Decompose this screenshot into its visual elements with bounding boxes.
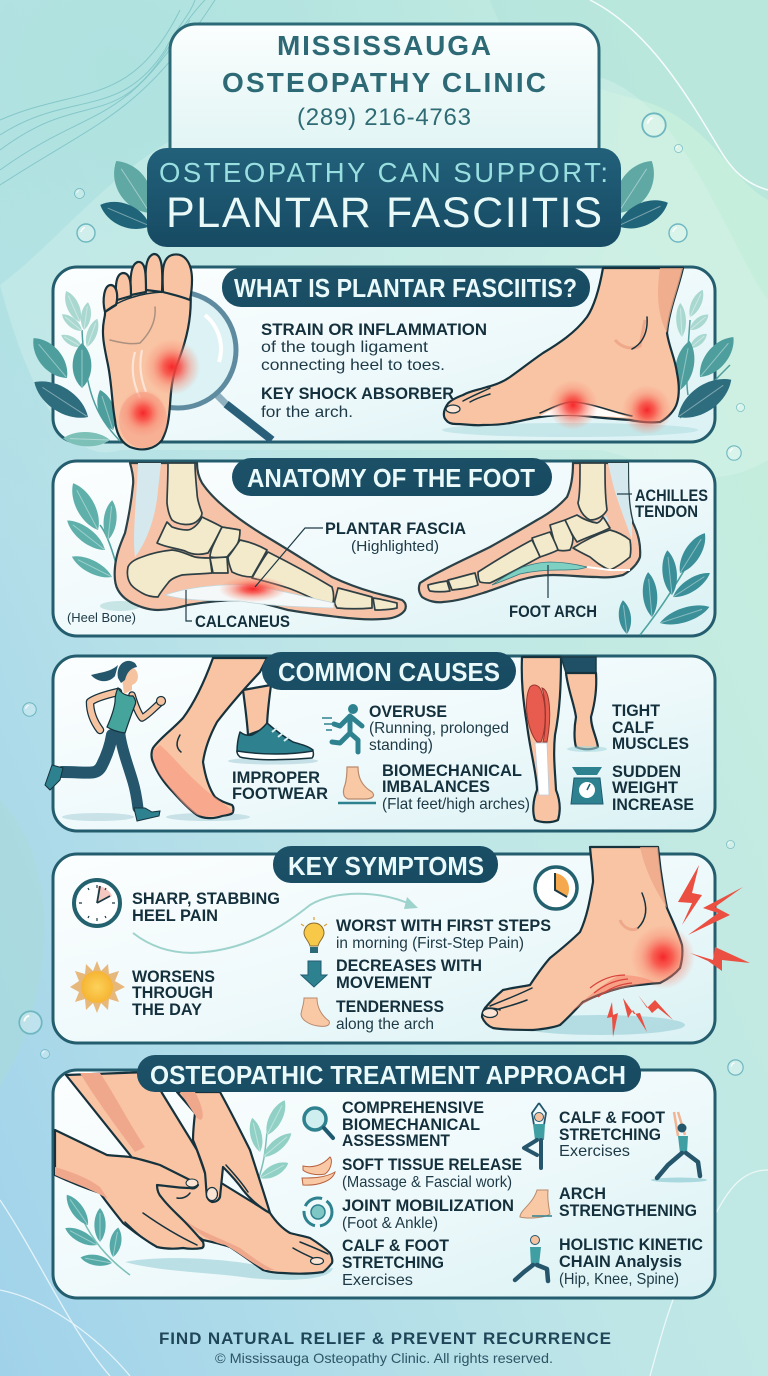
arrow: curve — [133, 894, 418, 953]
icon: flat foot — [338, 767, 376, 803]
text: arch: STRENGTHENING — [559, 1201, 697, 1220]
text: assessment: COMPREHENSIVE — [342, 1098, 484, 1117]
panel: anatomy — [53, 458, 715, 636]
text: tenderness: along the arch — [336, 1016, 434, 1033]
icon: clock — [74, 880, 120, 926]
header card: clinic: OSTEOPATHY CLINIC — [222, 67, 546, 98]
title banner: OSTEOPATHY CAN SUPPORT: — [159, 157, 608, 188]
text: stretching right — [559, 1108, 666, 1160]
definition text: connecting heel to toes. — [261, 357, 445, 374]
text: overuse — [369, 702, 509, 754]
text: sudden weight — [612, 762, 694, 814]
ground shadow — [515, 1015, 685, 1035]
text: joint mobilization: JOINT MOBILIZATION — [342, 1196, 514, 1215]
text: sudden weight: SUDDEN — [612, 762, 681, 781]
therapist lower hand — [55, 1130, 204, 1249]
title banner — [147, 148, 621, 247]
heading — [273, 846, 498, 883]
icon: light bulb — [301, 917, 327, 953]
heading: ANATOMY OF THE FOOT — [247, 465, 535, 493]
heading: COMMON CAUSES — [278, 659, 500, 687]
text: soft tissue — [342, 1155, 522, 1191]
anatomy labels: ACHILLES — [635, 486, 708, 505]
text: first steps: WORST WITH FIRST STEPS — [336, 916, 551, 935]
anatomical foot left — [100, 463, 406, 619]
icon: sun — [70, 961, 125, 1013]
foot side illustration — [442, 268, 698, 437]
definition text: KEY SHOCK ABSORBER — [261, 384, 454, 403]
anatomy labels: PLANTAR FASCIA — [325, 519, 466, 538]
panel: common causes — [45, 652, 715, 831]
icon: pain bolts — [607, 865, 750, 1037]
anatomy labels — [67, 486, 708, 631]
ground shadow — [125, 1258, 333, 1280]
leader lines — [186, 494, 632, 621]
text: worsens — [132, 967, 215, 1019]
icon: clock with orange wedge — [535, 867, 577, 909]
text: tight calf: CALF — [612, 718, 654, 737]
copyright: © Mississauga Osteopathy Clinic. All rights reserved. — [215, 1350, 553, 1366]
heading — [222, 268, 590, 307]
heading — [262, 652, 516, 690]
text: overuse: standing) — [369, 737, 433, 754]
icon: yoga figure — [524, 1103, 546, 1168]
text: stretching right: STRETCHING — [559, 1125, 661, 1144]
text: worsens: THROUGH — [132, 983, 213, 1002]
text: improper footwear: FOOTWEAR — [232, 784, 328, 803]
panel: what is plantar fasciitis — [25, 254, 741, 449]
text: improper footwear — [232, 768, 328, 803]
text: tight calf: MUSCLES — [612, 734, 689, 753]
text: tight calf: TIGHT — [612, 701, 661, 720]
definition text: STRAIN OR INFLAMMATION — [261, 320, 487, 339]
text: biomechanical imbalances — [382, 761, 530, 813]
text: kinetic chain: CHAIN Analysis — [559, 1252, 682, 1271]
icon: joint mobilization — [304, 1198, 332, 1226]
foot sole illustration — [103, 254, 200, 449]
text: soft tissue: (Massage & Fascial work) — [342, 1174, 512, 1191]
text: biomechanical imbalances: (Flat feet/high arches) — [382, 796, 530, 813]
definition text: of the tough ligament — [261, 339, 429, 356]
text: kinetic chain — [559, 1235, 703, 1288]
text: sharp pain — [132, 889, 280, 925]
text: kinetic chain: HOLISTIC KINETIC — [559, 1235, 703, 1254]
anatomy labels: (Heel Bone) — [67, 610, 136, 625]
icon: running person — [322, 704, 362, 752]
magnifying glass — [120, 292, 272, 440]
header card: clinic — [170, 24, 599, 174]
text: sharp pain: HEEL PAIN — [132, 906, 218, 925]
text: tight calf — [612, 701, 689, 753]
heading: KEY SYMPTOMS — [288, 853, 484, 881]
panel: key symptoms — [53, 846, 750, 1043]
therapist upper hand — [177, 1092, 270, 1213]
leaves — [62, 1097, 295, 1275]
text: sudden weight: INCREASE — [612, 795, 694, 814]
anatomy labels: TENDON — [635, 502, 698, 521]
text: first steps — [336, 916, 551, 952]
anatomical foot right — [419, 463, 640, 602]
title banner: PLANTAR FASCIITIS — [166, 189, 602, 237]
header card: clinic: (289) 216-4763 — [297, 104, 471, 131]
definition text — [261, 320, 487, 421]
text: stretching: Exercises — [342, 1272, 413, 1289]
text: improper footwear: IMPROPER — [232, 768, 320, 787]
text: tenderness — [336, 997, 444, 1033]
footer tagline: FIND NATURAL RELIEF & PREVENT RECURRENCE — [159, 1329, 611, 1348]
text: first steps: in morning (First-Step Pain) — [336, 935, 524, 952]
calf muscle illustration — [522, 657, 561, 822]
icon: magnifier — [304, 1108, 333, 1138]
runner — [45, 661, 166, 821]
text: stretching — [342, 1236, 450, 1289]
text: stretching right: CALF & FOOT — [559, 1108, 666, 1127]
text: overuse: OVERUSE — [369, 702, 447, 721]
icon: weight scale — [571, 767, 603, 804]
text: arch — [559, 1184, 697, 1220]
anatomy labels: FOOT ARCH — [509, 602, 597, 621]
leaves — [63, 479, 713, 635]
painful foot illustration — [482, 847, 695, 1030]
text: sudden weight: WEIGHT — [612, 778, 679, 797]
text: decreases: MOVEMENT — [336, 973, 433, 992]
heading: OSTEOPATHIC TREATMENT APPROACH — [150, 1062, 626, 1090]
text: joint mobilization: (Foot & Ankle) — [342, 1215, 438, 1232]
second leg illustration — [561, 657, 607, 752]
text: biomechanical imbalances: BIOMECHANICAL — [382, 761, 522, 780]
text: decreases — [336, 956, 482, 992]
text: overuse: (Running, prolonged — [369, 720, 509, 737]
text: assessment — [342, 1098, 484, 1150]
heading: WHAT IS PLANTAR FASCIITIS? — [234, 275, 577, 303]
second leg and shoe — [228, 685, 318, 764]
anatomy labels: CALCANEUS — [195, 612, 290, 631]
header card: clinic: MISSISSAUGA — [277, 30, 491, 61]
ground shadows — [62, 813, 250, 821]
icon: arch foot — [520, 1190, 552, 1218]
text: assessment: ASSESSMENT — [342, 1131, 451, 1150]
text: worsens: THE DAY — [132, 1000, 203, 1019]
icon: warrior pose — [651, 1112, 707, 1182]
leg and foot illustration — [152, 658, 267, 818]
text: biomechanical imbalances: IMBALANCES — [382, 777, 490, 796]
text: stretching right: Exercises — [559, 1143, 630, 1160]
text: joint mobilization — [342, 1196, 514, 1232]
text: arch: ARCH — [559, 1184, 606, 1203]
text: tenderness: TENDERNESS — [336, 997, 444, 1016]
text: stretching: CALF & FOOT — [342, 1236, 450, 1255]
definition text: for the arch. — [261, 404, 353, 421]
icon: small foot — [301, 998, 329, 1026]
text: assessment: BIOMECHANICAL — [342, 1115, 480, 1134]
text: kinetic chain: (Hip, Knee, Spine) — [559, 1271, 679, 1288]
text: sharp pain: SHARP, STABBING — [132, 889, 280, 908]
decorative bubbles — [19, 113, 745, 1075]
panel: treatment — [53, 1055, 715, 1298]
text: soft tissue: SOFT TISSUE RELEASE — [342, 1155, 522, 1174]
icon: lunge figure — [515, 1236, 548, 1281]
patient leg and foot — [66, 1072, 332, 1274]
icon: down arrow — [301, 961, 327, 987]
text: worsens: WORSENS — [132, 967, 215, 986]
text: decreases: DECREASES WITH — [336, 956, 482, 975]
anatomy labels: (Highlighted) — [351, 539, 439, 555]
banner leaves — [96, 153, 673, 236]
icon: massage hands — [302, 1157, 335, 1185]
text: stretching: STRETCHING — [342, 1253, 444, 1272]
leaves — [25, 288, 741, 447]
